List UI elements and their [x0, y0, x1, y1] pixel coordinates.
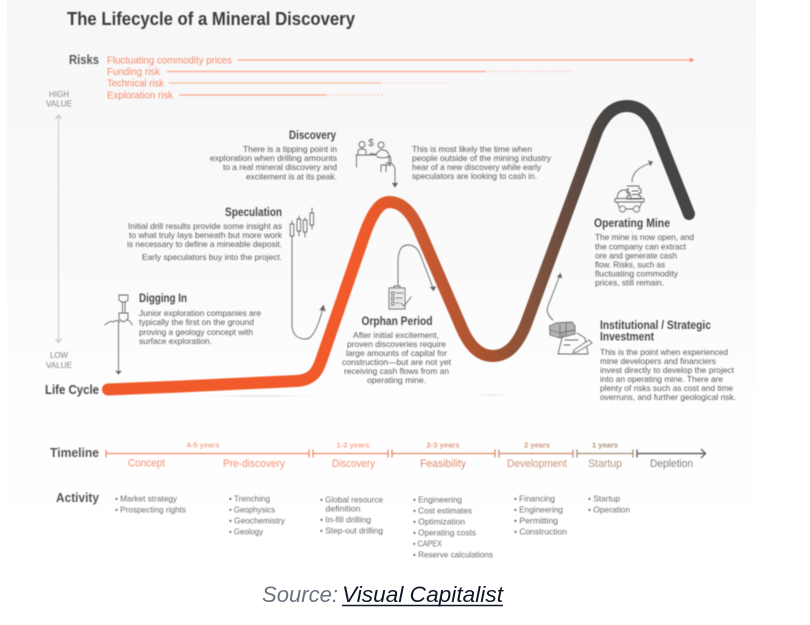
- activities: startup: [588, 494, 630, 514]
- activities: discovery: [320, 496, 383, 536]
- risk: technical: Technical risk: [107, 78, 165, 90]
- activities: development: • Engineering: [514, 506, 563, 514]
- timeline segment: startup: [577, 450, 633, 458]
- block: speculation: Initial drill results provide some insight as: [128, 222, 282, 231]
- timeline: [50, 440, 706, 470]
- icon: investment money and contract: [547, 274, 592, 354]
- block: hype text: hear of a new discovery while early: [412, 163, 542, 172]
- timeline: Discovery: [332, 458, 375, 470]
- activity: [56, 491, 630, 560]
- low value label: LOW: [50, 350, 68, 360]
- timeline segment: depletion arrow: [637, 449, 706, 458]
- infographic content: [45, 8, 736, 560]
- risk: exploration: Exploration risk: [107, 90, 174, 102]
- icon: shovel with arrow: [105, 295, 132, 374]
- curve shadows: [185, 394, 517, 398]
- timeline segment: feasibility: [392, 450, 495, 458]
- block: operating mine: flow. Risks, such as: [595, 260, 665, 269]
- block: speculation: is necessary to define a mineable deposit.: [127, 240, 282, 249]
- block: discovery: There is a tipping point in: [243, 145, 337, 154]
- activities: feasibility: • Reserve calculations: [413, 550, 493, 560]
- activities: feasibility: • CAPEX: [413, 540, 442, 548]
- activities: pre-discovery: • Geology: [229, 528, 264, 536]
- block: operating mine: The mine is now open, and: [595, 233, 694, 242]
- activities: development: • Permitting: [514, 516, 558, 526]
- block: discovery: excitement is at its peak.: [246, 172, 337, 182]
- block: speculation: Speculation: [225, 207, 282, 219]
- activities: feasibility: • Cost estimates: [413, 506, 472, 516]
- block: discovery: Discovery: [289, 130, 337, 142]
- activities: discovery: definition: [326, 504, 361, 514]
- timeline segment: development: [499, 450, 573, 458]
- block: operating mine: Operating Mine: [594, 218, 670, 230]
- activities: discovery: • Global resource: [320, 496, 383, 504]
- icon: candlesticks with arrow: [290, 208, 325, 339]
- title: The Lifecycle of a Mineral Discovery: [67, 8, 356, 29]
- block: operating mine: the company can extract: [595, 242, 687, 251]
- block: orphan period: construction—but are not yet: [342, 358, 452, 367]
- block: orphan period: After initial excitement,: [353, 331, 439, 340]
- block: discovery: [210, 130, 337, 182]
- block: orphan period: large amounts of capital for: [346, 349, 447, 358]
- activities: development: • Financing: [514, 494, 555, 504]
- block: digging in: [139, 293, 261, 346]
- block: discovery: to a real mineral discovery and: [223, 163, 337, 172]
- phase labels: Concept: [128, 458, 165, 470]
- activities: concept: • Market strategy: [115, 494, 178, 504]
- block: discovery: exploration when drilling amounts: [210, 154, 337, 163]
- source line: Source:: [262, 582, 338, 607]
- source line: [262, 582, 504, 607]
- risk: fluctuating commodity prices: Fluctuating commodity prices: [107, 54, 232, 66]
- high value label: HIGH: [49, 89, 69, 99]
- block: speculation: to what truly lays beneath but more work: [129, 231, 283, 240]
- block: institutional investment: This is the point when experienced: [600, 348, 728, 357]
- block: digging in: Junior exploration companies are: [139, 309, 261, 318]
- icon: discovery meeting: $: [368, 138, 374, 149]
- activities: pre-discovery: • Geochemistry: [229, 516, 286, 526]
- block: speculation: Early speculators buy into the project.: [142, 253, 282, 262]
- activities: development: [514, 494, 567, 536]
- block: institutional investment: invest directly to develop the project: [600, 366, 735, 375]
- timeline: Feasibility: [420, 458, 466, 470]
- activities: discovery: • Step-out drilling: [320, 526, 383, 536]
- activities: feasibility: • Operating costs: [413, 528, 476, 538]
- timeline: 1 years: [592, 440, 618, 450]
- activities: startup: • Startup: [588, 494, 620, 504]
- block: operating mine: prices, still remain.: [595, 279, 664, 288]
- activities: concept: [115, 494, 186, 514]
- block: digging in: Digging In: [139, 293, 187, 305]
- block: institutional investment: into an operating mine. There are: [600, 375, 723, 384]
- icon: clipboard with arrow: [389, 245, 436, 309]
- block: institutional investment: Investment: [600, 332, 654, 344]
- block: hype text: speculators are looking to cash in.: [412, 172, 537, 181]
- activities: pre-discovery: • Trenching: [229, 494, 270, 504]
- risks heading: Risks: [69, 53, 99, 67]
- block: institutional investment: Institutional / Strategic: [600, 320, 712, 332]
- block: digging in: surface exploration.: [139, 337, 212, 346]
- activities: feasibility: • Engineering: [413, 496, 462, 504]
- block: operating mine: [594, 218, 694, 288]
- value axis: VALUE: [46, 98, 72, 108]
- life cycle label: Life Cycle: [45, 382, 99, 397]
- block: hype text: This is most likely the time when: [412, 145, 532, 154]
- lifecycle curve: [108, 106, 689, 390]
- block: speculation: [127, 207, 283, 262]
- icon: mine cart with arrow: [615, 161, 652, 212]
- activities: pre-discovery: [229, 494, 286, 536]
- risk: fluctuating commodity prices: [107, 54, 694, 66]
- activities: feasibility: • Optimization: [413, 518, 465, 526]
- source line: Visual Capitalist: [342, 582, 504, 607]
- timeline: Pre-discovery: [223, 458, 285, 470]
- block: operating mine: fluctuating commodity: [595, 270, 679, 279]
- block: orphan period: [342, 316, 452, 385]
- block: orphan period: Orphan Period: [362, 316, 432, 328]
- block: institutional investment: overruns, and further geological risk.: [600, 393, 736, 402]
- timeline: Startup: [588, 458, 622, 470]
- activities: concept: • Prospecting rights: [115, 506, 186, 514]
- block: operating mine: ore and generate cash: [595, 251, 677, 260]
- duration labels: 4-5 years: [186, 440, 220, 450]
- block: hype text: [412, 145, 552, 181]
- block: digging in: proving a geology concept with: [139, 328, 253, 337]
- block: institutional investment: mine developers and financiers: [600, 357, 716, 366]
- activities: startup: • Operation: [588, 506, 630, 514]
- value axis: VALUE: [46, 360, 72, 370]
- block: hype text: people outside of the mining industry: [412, 154, 552, 163]
- icon: discovery meeting: [356, 138, 398, 187]
- block: institutional investment: plenty of risks such as cost and time: [600, 384, 733, 393]
- timeline segment: discovery: [313, 450, 388, 458]
- timeline: 2 years: [524, 440, 550, 450]
- activity heading: Activity: [56, 491, 99, 505]
- risks section: [69, 53, 694, 102]
- risk: funding: Funding risk: [107, 66, 161, 78]
- activities: pre-discovery: • Geophysics: [229, 506, 275, 514]
- block: institutional investment: [600, 320, 736, 402]
- timeline: Development: [507, 458, 567, 470]
- block: orphan period: proven discoveries require: [347, 340, 446, 349]
- timeline segment: concept and pre-discovery: [106, 450, 309, 458]
- activities: development: • Construction: [514, 528, 567, 536]
- timeline: Depletion: [650, 458, 693, 470]
- timeline: 2-3 years: [426, 440, 460, 450]
- block: digging in: typically the first on the ground: [139, 318, 254, 327]
- value axis: [46, 89, 72, 370]
- timeline: 1-2 years: [336, 440, 370, 450]
- activities: discovery: • In-fill drilling: [320, 516, 371, 524]
- activities: feasibility: [413, 496, 493, 560]
- timeline heading: Timeline: [50, 446, 99, 460]
- block: orphan period: receiving cash flows from an: [344, 367, 449, 376]
- block: orphan period: operating mine.: [367, 376, 426, 385]
